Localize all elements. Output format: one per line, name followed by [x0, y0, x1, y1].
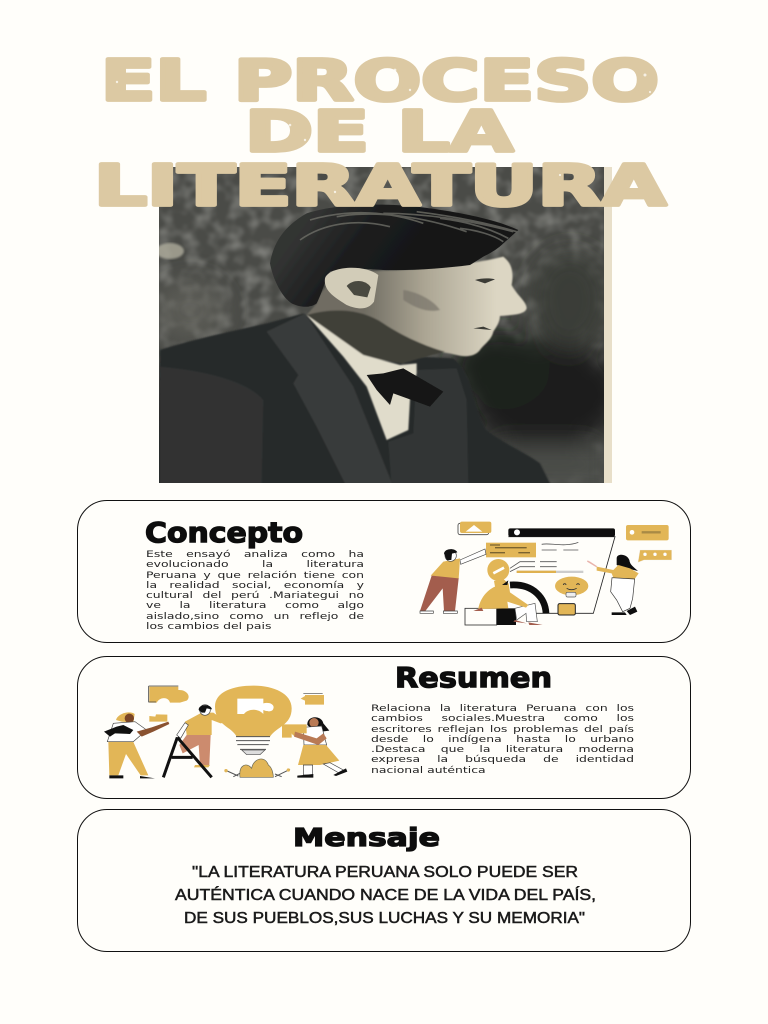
bow tie	[367, 368, 443, 407]
text block: resumen: nacional auténtica	[371, 764, 486, 775]
text block: resumen: expresa la búsqueda de identidad	[371, 754, 634, 764]
text block: concepto: Este ensayó analiza como ha	[146, 548, 364, 559]
woman with headscarf	[116, 712, 135, 723]
text block: resumen: Relaciona la literatura Peruana con los	[371, 702, 634, 713]
ear	[325, 268, 378, 308]
bulb	[555, 577, 588, 595]
eye and mouth	[473, 278, 495, 330]
ladder	[163, 737, 212, 777]
heading: concepto: Concepto	[145, 517, 303, 549]
text block: resumen: .Destaca que la literatura moderna	[371, 743, 634, 754]
text block: concepto: ve la literatura como algo	[146, 600, 364, 610]
text block: resumen: desde lo indígena hasta lo urbano	[371, 733, 634, 744]
light bulb	[215, 686, 292, 737]
mug	[558, 604, 575, 615]
illustration: team assembling a light bulb	[104, 686, 347, 778]
man on ladder	[185, 713, 235, 735]
text block: concepto	[146, 548, 364, 631]
puzzle piece right	[301, 695, 324, 705]
black arch	[510, 585, 546, 613]
jacket	[157, 313, 552, 487]
cube seat	[465, 608, 497, 625]
puzzle piece top	[149, 687, 189, 703]
text block: resumen	[371, 702, 634, 775]
illustration: team building a web page	[420, 522, 672, 625]
code card	[486, 543, 536, 557]
triangle tag	[458, 523, 489, 535]
quote line 3: DE SUS PUEBLOS,SUS LUCHAS Y SU MEMORIA"	[184, 910, 585, 927]
title	[94, 49, 667, 219]
heading: resumen: Resumen	[395, 662, 552, 694]
photo and drawn artwork layer	[98, 56, 672, 926]
man standing	[460, 549, 486, 564]
photo: portrait of man in profile	[155, 167, 625, 490]
info card	[626, 525, 669, 540]
screen	[490, 537, 615, 613]
text block: concepto: la realidad social, economía y	[146, 579, 364, 590]
title line 2: DE LA	[245, 100, 514, 165]
message quote	[175, 864, 596, 927]
shirt	[307, 315, 417, 440]
plants at bulb base	[240, 759, 273, 777]
text block: resumen: cambios sociales.Muestra como los	[371, 713, 634, 723]
text block: concepto: evolucionado la literatura	[146, 559, 364, 569]
quote line 1: "LA LITERATURA PERUANA SOLO PUEDE SER	[192, 864, 578, 881]
panel: mensaje	[77, 809, 691, 952]
neck and face	[307, 257, 527, 363]
speech bubble	[638, 550, 672, 562]
text block: concepto: los cambios del pais	[146, 620, 271, 631]
text block: resumen: escritores reflejan los problemas del país	[371, 723, 634, 734]
seated person	[515, 603, 537, 622]
photo paper edge	[604, 167, 612, 483]
panel: concepto	[77, 500, 691, 643]
wrench badge	[487, 559, 509, 581]
woman right	[617, 555, 638, 571]
text block: concepto: cultural del perú .Mariategui no	[146, 589, 364, 600]
heading: mensaje: Mensaje	[293, 823, 440, 852]
text block: concepto: aislado,sino como un reflejo de	[146, 610, 364, 621]
title line 1: EL PROCESO	[101, 49, 659, 114]
quote line 2: AUTÉNTICA CUANDO NACE DE LA VIDA DEL PAÍS,	[175, 887, 596, 904]
hair	[270, 205, 518, 307]
man	[157, 205, 552, 487]
woman with puzzle piece	[307, 717, 329, 732]
text block: concepto: Peruana y que relación tiene con	[146, 569, 364, 580]
panel: resumen	[77, 656, 691, 799]
title line 3: LITERATURA	[94, 154, 667, 219]
title print texture	[116, 69, 651, 193]
